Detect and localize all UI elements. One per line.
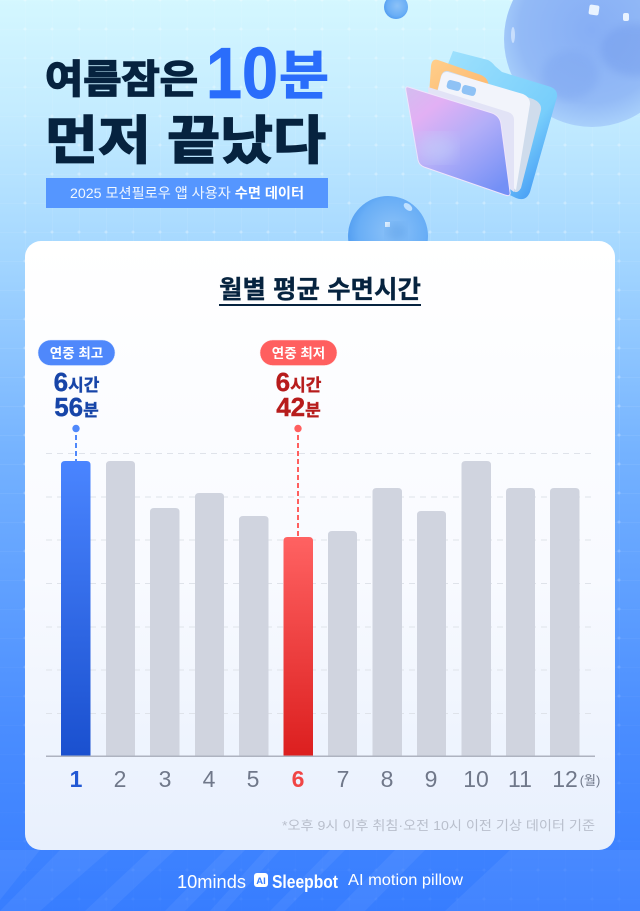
x axis labels: 9: [425, 766, 437, 792]
title: 여름잠은 10분 먼저 끝났다: 10: [206, 34, 278, 114]
title: 여름잠은 10분 먼저 끝났다: 분: [279, 34, 329, 110]
logo: Sleepbot: AI: [256, 876, 266, 887]
icon: folder: [406, 51, 557, 199]
x axis labels: 3: [159, 766, 171, 792]
x axis labels: 10: [463, 766, 489, 792]
callout: yearly high: 연중 최고: [50, 346, 103, 361]
x axis labels: 5: [247, 766, 259, 792]
callout: yearly low: 6시간: [276, 367, 322, 397]
x axis labels: 8: [381, 766, 393, 792]
x axis labels: 1: [70, 766, 83, 792]
x axis labels: 12: [552, 766, 578, 792]
bar chart: [46, 461, 595, 757]
logo: Sleepbot: [254, 871, 338, 892]
footer logos: [177, 871, 464, 892]
logo: Sleepbot: Sleepbot: [272, 871, 338, 892]
footnote: *오후 9시 이후 취침·오전 10시 이전 기상 데이터 기준: [282, 818, 595, 833]
callout: yearly low: 42분: [276, 392, 321, 422]
bubble: lower middle: [348, 196, 428, 276]
callout: yearly high: 6시간: [54, 367, 100, 397]
x axis labels: 11: [508, 766, 532, 792]
subtitle banner: [46, 178, 328, 208]
title: 여름잠은 10분 먼저 끝났다: 먼저 끝났다: [45, 99, 326, 174]
x axis labels: 4: [203, 766, 216, 792]
callout: yearly high: 56분: [54, 392, 99, 422]
logo: AI motion pillow: AI motion pillow: [348, 872, 464, 889]
x axis labels: 7: [337, 766, 349, 792]
logo: 10minds: 10minds: [177, 872, 246, 892]
title: 여름잠은 10분 먼저 끝났다: [45, 34, 329, 174]
bubble: large top right: [504, 0, 640, 127]
x axis labels: 6: [292, 766, 304, 792]
callout: yearly high: [38, 340, 115, 461]
x axis labels: (월): [580, 773, 600, 788]
bubble: small top: [384, 0, 408, 19]
panel: chart card: [25, 241, 615, 850]
title: 여름잠은 10분 먼저 끝났다: 여름잠은: [45, 49, 198, 105]
x axis labels: [70, 766, 600, 792]
subtitle banner: 2025 모션필로우 앱 사용자 수면 데이터: [70, 186, 304, 202]
x axis labels: 2: [114, 766, 126, 792]
chart heading: 월별 평균 수면시간: [219, 276, 421, 304]
callout: yearly low: 연중 최저: [272, 346, 325, 361]
callout: yearly low: [260, 340, 337, 537]
grid lines: [46, 454, 595, 714]
